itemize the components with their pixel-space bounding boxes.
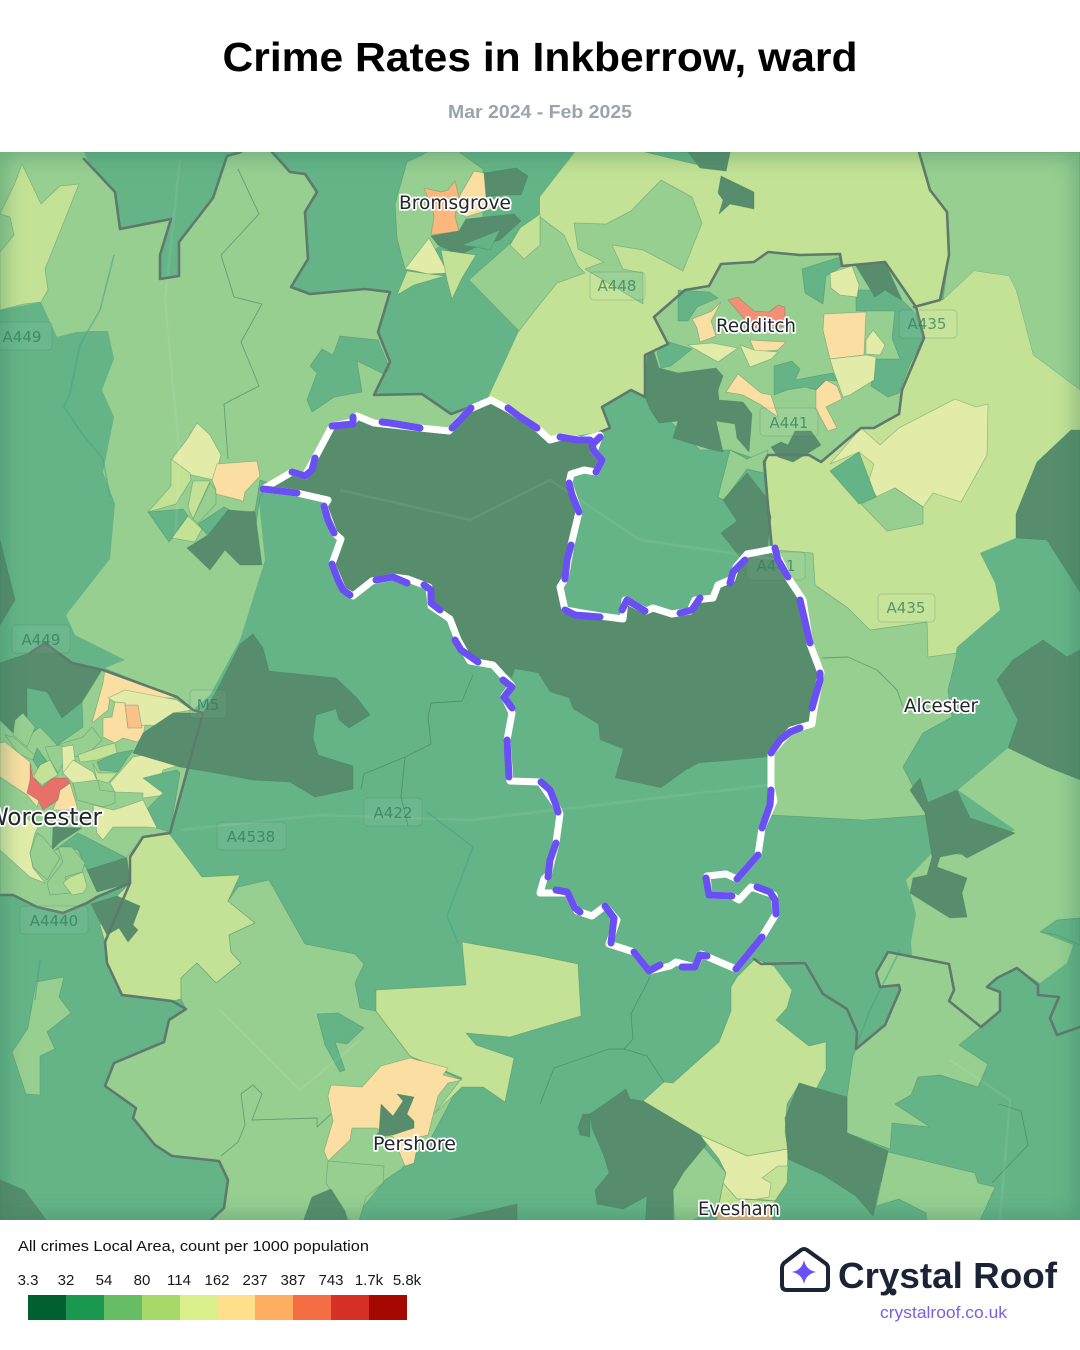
internal parish lines: [221, 169, 1028, 1183]
road label A449 north: [0, 322, 52, 350]
road label A4538: [217, 822, 286, 850]
website link: crystalroof.co.uk: [880, 1303, 1008, 1322]
town label Redditch: Redditch: [716, 315, 796, 337]
road label M5: M5: [197, 696, 219, 714]
road label A441 Redditch: A441: [770, 414, 808, 432]
legend scale labels: 5.8k: [393, 1272, 422, 1289]
regions: rural north and west: [0, 152, 491, 710]
road label A441 ward: A441: [757, 557, 795, 575]
town label Bromsgrove: Bromsgrove: [399, 192, 511, 214]
legend scale labels: 743: [318, 1272, 344, 1289]
road label A449 north: A449: [3, 328, 41, 346]
road label A435 south: [878, 594, 935, 622]
region: Inkberrow ward high band: [263, 400, 821, 788]
legend scale labels: 114: [167, 1272, 191, 1289]
regions: Bromsgrove town: [395, 152, 528, 299]
logo icon: house with star: [782, 1249, 828, 1290]
road label A435 north: A435: [908, 315, 946, 333]
road label A4440: A4440: [30, 912, 78, 930]
legend scale labels: 54: [96, 1272, 112, 1289]
road label M5: [190, 690, 226, 718]
road label A435 south: A435: [887, 599, 925, 617]
road label A4538: A4538: [227, 828, 275, 846]
legend scale labels: 1.7k: [355, 1272, 384, 1289]
legend heading: All crimes Local Area, count per 1000 population: [18, 1238, 369, 1255]
regions: north-east and east: [469, 152, 1080, 1027]
legend scale labels: 237: [242, 1272, 268, 1289]
regions: Droitwich town: [0, 423, 270, 625]
legend scale labels: 3.3: [18, 1272, 38, 1289]
town label Alcester: Alcester: [904, 695, 978, 717]
road labels: [0, 272, 957, 934]
regions: Evesham and south-east: [578, 952, 995, 1232]
road label A435 north: [899, 310, 957, 338]
regions: western dark area by the M5: [133, 634, 370, 797]
road label A422: A422: [374, 804, 412, 822]
legend scale labels: 162: [204, 1272, 230, 1289]
title: Crime Rates in Inkberrow, ward: [222, 34, 858, 80]
ward boundary: Inkberrow dashed outline: [263, 400, 821, 971]
town label Pershore: Pershore: [373, 1133, 456, 1155]
legend scale labels: 80: [134, 1272, 150, 1289]
road label A441 ward: [747, 552, 805, 580]
district boundary lines: [0, 152, 1080, 1221]
subtitle: date range: Mar 2024 - Feb 2025: [448, 102, 632, 122]
road label A448: [590, 272, 645, 300]
logo wordmark: Crystal Roof: [838, 1255, 1058, 1296]
legend scale labels: 32: [58, 1272, 74, 1289]
road label A449 west: A449: [22, 631, 60, 649]
road label A422: [364, 798, 422, 826]
regions: Worcester city: [0, 643, 203, 913]
map edge vignette: [0, 146, 1080, 1226]
legend scale labels: [18, 1272, 422, 1289]
legend colour bar: [28, 1295, 407, 1320]
regions: Pershore town: [303, 1058, 517, 1228]
road label A4440: [20, 906, 88, 934]
regions: Redditch town: [645, 252, 924, 566]
town label Evesham: Evesham: [698, 1198, 780, 1220]
regions: rural south-west: [0, 832, 581, 1232]
roads and rivers: [35, 160, 1010, 1220]
road label A441 Redditch: [760, 408, 818, 436]
road label A448: A448: [598, 277, 636, 295]
legend scale labels: 387: [280, 1272, 306, 1289]
road label A449 west: [12, 625, 70, 653]
